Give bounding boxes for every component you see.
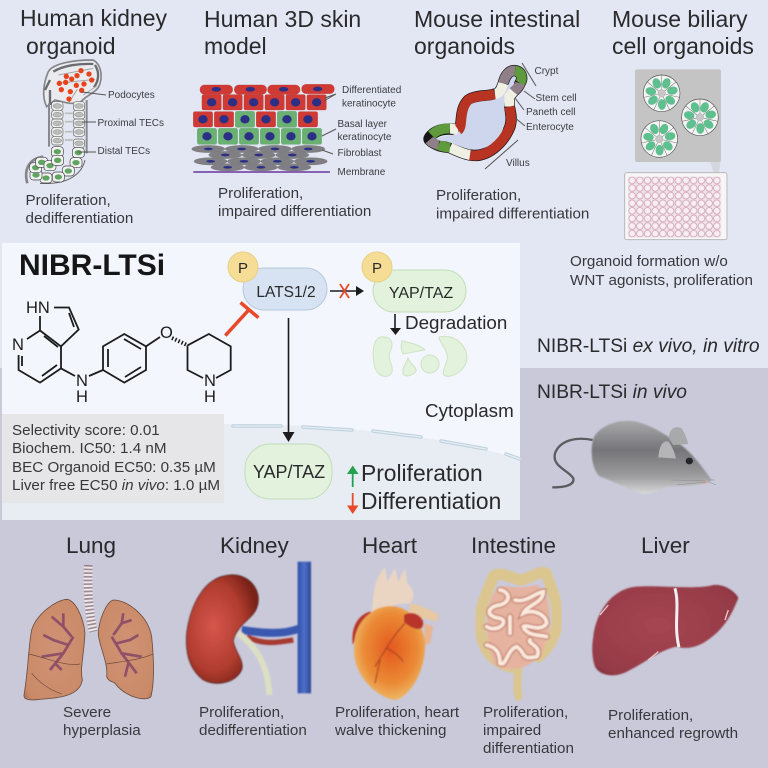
caption: intestine: impaired [483,722,541,739]
degraded fragments [373,336,467,376]
panel: intestine [471,533,574,757]
arrow into nucleus [282,318,294,442]
caption: lung: Severe [63,704,111,721]
phospho badge on YAP [362,252,392,282]
heading: mouse biliary cell organoids: cell organoids [612,33,754,59]
stats box [2,414,224,503]
labels: intestinal parts: Villus [506,158,530,169]
label: differentiation: Differentiation [361,488,501,514]
node: YAP/TAZ nucleus [245,444,332,499]
panel: kidney [186,533,311,739]
caption: liver: Proliferation, [608,707,693,724]
caption: intestine: differentiation [483,740,574,757]
icon: mouse [552,421,716,494]
caption: intestinal effects: impaired differentiation [436,206,589,222]
labels: intestinal parts [485,63,577,169]
chemical structure: O [160,324,173,342]
node: YAP/TAZ cytoplasm: YAP/TAZ [389,285,453,302]
node: YAP/TAZ cytoplasm [373,270,466,312]
nuclear membrane [233,426,520,459]
labels: intestinal parts: Crypt [534,66,559,77]
caption: kidney: dedifferentiation [199,722,307,739]
diagram: intestinal organoid [429,71,522,155]
heading: human kidney organoid: organoid [26,33,116,59]
chemical structure: N [204,372,216,390]
labels: intestinal parts: Paneth cell [526,107,575,118]
labels: skin layers [322,85,401,178]
caption: skin effects: impaired differentiation [218,203,371,220]
panel: heart [334,533,460,739]
chemical structure: H [204,388,216,406]
caption: heart: Proliferation, heart [335,704,460,721]
labels: skin layers: Basal layer [338,119,388,130]
labels: kidney organoid parts: Podocytes [108,90,155,101]
label: degradation: Degradation [405,312,507,333]
panel: liver [592,533,738,742]
caption: skin effects: Proliferation, [218,185,303,202]
chemical structure [12,299,231,406]
heading: heart: Heart [362,533,418,558]
zone label: ex vivo: NIBR-LTSi ex vivo, in vitro [537,336,760,357]
caption: heart: walve thickening [334,722,446,739]
caption: biliary effects: WNT agonists, proliferation [570,272,753,289]
caption: intestinal effects: Proliferation, [436,187,521,204]
background: ex vivo, in vitro zone [0,0,768,368]
blocked arrow [330,284,364,298]
heading: human 3D skin model: Human 3D skin [204,6,361,32]
background: in vivo zone [0,368,768,768]
caption: intestine: Proliferation, [483,704,568,721]
caption: liver: enhanced regrowth [608,725,738,742]
phospho badge on YAP: P [372,260,382,277]
chemical structure: N [12,336,24,354]
icon: intestine [480,573,558,697]
degradation arrow [390,314,401,335]
diagram: skin layers [192,84,334,172]
stats box: BEC Organoid EC50: 0.35 µM [12,459,216,476]
caption: biliary effects: Organoid formation w/o [570,253,728,270]
label: cytoplasm: Cytoplasm [425,400,514,421]
chemical structure: H [76,388,88,406]
heading: mouse intestinal organoids: organoids [414,33,515,59]
chemical structure: N [76,372,88,390]
icon: lungs [24,565,153,700]
panel: lung [24,533,153,739]
phospho badge on LATS: P [238,260,248,277]
panel: NIBR-LTSi mechanism [2,243,520,520]
caption: kidney organoid effects: Proliferation, [26,192,111,209]
heading: human 3D skin model: model [204,33,267,59]
labels: skin layers: Fibroblast [338,148,382,159]
zone label: in vivo: NIBR-LTSi in vivo [537,382,687,403]
up arrow [347,466,358,487]
heading: kidney: Kidney [220,533,290,558]
caption: kidney organoid effects: dedifferentiation [26,210,133,227]
chemical structure: HN [26,299,50,317]
node: LATS1/2 [243,268,327,310]
down arrow [347,493,358,514]
icon: kidney [186,562,311,695]
labels: intestinal parts: Enterocyte [526,122,574,133]
labels: skin layers: keratinocyte [342,98,396,110]
heading: lung: Lung [66,533,116,558]
node: LATS1/2: LATS1/2 [256,284,316,301]
stats box: Selectivity score: 0.01 [12,422,160,439]
node: YAP/TAZ nucleus: YAP/TAZ [253,462,325,482]
stats box: Biochem. IC50: 1.4 nM [12,440,166,457]
inhibition bar [225,302,258,336]
panel: human 3D skin model [192,6,401,220]
labels: intestinal parts: Stem cell [536,93,577,104]
heading: human kidney organoid: Human kidney [20,5,168,31]
heading: liver: Liver [641,533,690,558]
labels: skin layers: Membrane [338,167,386,178]
heading: intestine: Intestine [471,533,556,558]
caption: lung: hyperplasia [63,722,141,739]
heading: mouse intestinal organoids: Mouse intestinal [414,6,580,32]
heading: mouse biliary cell organoids: Mouse biliary [612,6,748,32]
phospho badge on LATS [228,252,258,282]
labels: kidney organoid parts [78,90,164,157]
panel: mouse intestinal organoids [414,6,589,222]
diagram: organoid well plate [625,69,727,240]
icon: heart [352,567,439,700]
panel: mouse biliary cell organoids [570,6,754,289]
title: NIBR-LTSi [19,249,165,282]
nucleus region [2,424,520,520]
labels: kidney organoid parts: Proximal TECs [98,118,164,129]
labels: kidney organoid parts: Distal TECs [98,146,150,157]
diagram: kidney organoid [26,60,101,183]
labels: skin layers: Differentiated [342,85,401,96]
icon: liver [592,585,738,675]
caption: kidney: Proliferation, [199,704,284,721]
stats box: Liver free EC50 in vivo: 1.0 µM [12,477,220,494]
labels: skin layers: keratinocyte [338,132,392,143]
label: proliferation: Proliferation [361,460,483,486]
panel: human kidney organoid [20,5,168,227]
